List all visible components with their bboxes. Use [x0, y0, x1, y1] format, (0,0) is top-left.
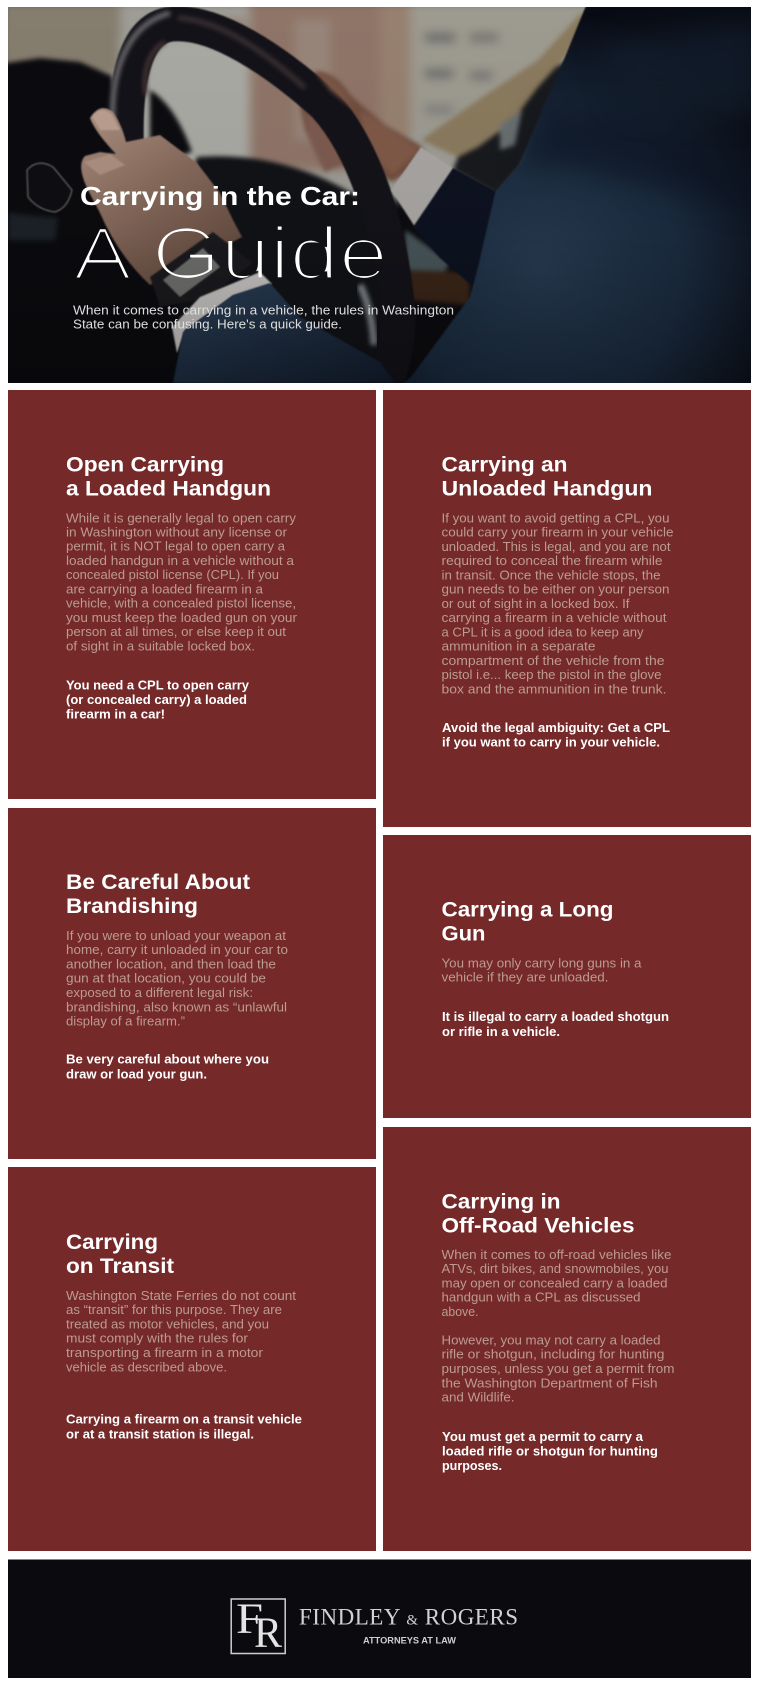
heading: a Loaded Handgun — [66, 477, 271, 501]
body text: Washington State Ferries do not count — [66, 1289, 297, 1303]
body text: gun needs to be either on your person — [442, 582, 670, 596]
heading: Gun — [442, 922, 486, 946]
body text: vehicle if they are unloaded. — [442, 971, 608, 985]
heading: Brandishing — [66, 894, 198, 918]
body text: concealed pistol license (CPL). If you — [66, 568, 279, 582]
body text: If you want to avoid getting a CPL, you — [442, 511, 670, 525]
body text: You may only carry long guns in a — [442, 957, 642, 971]
left sleeve — [173, 283, 395, 383]
heading — [442, 898, 614, 946]
callout: or at a transit station is illegal. — [66, 1427, 254, 1441]
body text: carrying a firearm in a vehicle without — [442, 611, 667, 625]
dashboard — [8, 55, 359, 240]
body text: a CPL it is a good idea to keep any — [442, 625, 644, 639]
body text — [66, 511, 297, 654]
panel: hero photo with title — [0, 0, 758, 395]
callout: You must get a permit to carry a — [442, 1430, 644, 1444]
heading: A Guide: A Guide — [73, 212, 388, 295]
heading: Unloaded Handgun — [442, 477, 652, 501]
body text: ammunition in a separate — [442, 640, 596, 654]
body text: gun at that location, you could be — [66, 972, 266, 986]
suit shoulder — [395, 0, 758, 390]
callout: (or concealed carry) a loaded — [66, 693, 247, 707]
heading: Carrying in the Car: Carrying in the Car: — [80, 181, 360, 211]
body text: in Washington without any license or — [66, 526, 287, 540]
panel: carrying in off-road vehicles — [383, 1127, 751, 1551]
body text: loaded handgun in a vehicle without a — [66, 554, 294, 568]
wristwatch — [150, 232, 253, 307]
body text: and Wildlife. — [442, 1391, 514, 1405]
body text: unloaded. This is legal, and you are not — [442, 540, 671, 554]
body text: permit, it is NOT legal to open carry a — [66, 540, 285, 554]
body text: or out of sight in a locked box. If — [442, 597, 630, 611]
body text: you must keep the loaded gun on your — [66, 611, 297, 625]
heading: Carrying a Long — [442, 898, 614, 922]
heading: on Transit — [66, 1254, 174, 1278]
intro text: State can be confusing. Here's a quick guide. — [73, 316, 342, 332]
callout — [442, 721, 670, 750]
left cuff — [172, 272, 272, 353]
panel: carrying on transit — [8, 1167, 376, 1551]
panel: be careful about brandishing — [8, 808, 376, 1159]
steering wheel rim — [113, 13, 398, 390]
right cuff and sleeve — [391, 147, 497, 285]
body text: vehicle, with a concealed pistol license, — [66, 597, 296, 611]
body text: required to conceal the firearm while — [442, 554, 663, 568]
body text — [442, 511, 674, 696]
callout: draw or load your gun. — [66, 1067, 207, 1081]
callout: Be very careful about where you — [66, 1052, 269, 1066]
beige pillar — [405, 13, 590, 305]
body text: treated as motor vehicles, and you — [66, 1318, 269, 1332]
body text: in transit. Once the vehicle stops, the — [442, 568, 661, 582]
body text: purposes, unless you get a permit from — [442, 1362, 674, 1376]
body text: could carry your firearm in your vehicle — [442, 526, 674, 540]
body text: pistol i.e... keep the pistol in the glove — [442, 668, 662, 682]
callout: if you want to carry in your vehicle. — [442, 736, 660, 750]
callout: loaded rifle or shotgun for hunting — [442, 1445, 658, 1459]
heading: Carrying an — [442, 453, 568, 477]
body text: vehicle as described above. — [66, 1360, 227, 1374]
thumb of right hand — [316, 72, 350, 109]
body text: transporting a firearm in a motor — [66, 1346, 263, 1360]
body text: are carrying a loaded firearm in a — [66, 582, 263, 596]
body text: If you were to unload your weapon at — [66, 929, 287, 943]
gear stalk — [27, 163, 72, 212]
heading — [66, 870, 250, 918]
callout: purposes. — [442, 1459, 502, 1473]
body text: person at all times, or else keep it out — [66, 625, 287, 639]
heading — [66, 1230, 174, 1278]
body text: ATVs, dirt bikes, and snowmobiles, you — [442, 1262, 669, 1276]
panel: open carrying a loaded handgun — [8, 390, 376, 799]
body text: the Washington Department of Fish — [442, 1376, 658, 1390]
body text: display of a firearm.” — [66, 1015, 185, 1029]
body text: above. — [442, 1305, 478, 1319]
body text — [442, 1248, 674, 1405]
body text: must comply with the rules for — [66, 1332, 248, 1346]
callout — [442, 1010, 669, 1039]
right hand — [300, 72, 430, 182]
heading — [66, 453, 271, 501]
callout: Carrying a firearm on a transit vehicle — [66, 1412, 302, 1426]
left hand — [81, 108, 242, 285]
body text: When it comes to off-road vehicles like — [442, 1248, 672, 1262]
body text — [66, 1289, 297, 1374]
body text: another location, and then load the — [66, 957, 276, 971]
heading — [442, 1189, 635, 1237]
body text: While it is generally legal to open carry — [66, 511, 297, 525]
callout: You need a CPL to open carry — [66, 678, 249, 692]
body text: as “transit” for this purpose. They are — [66, 1303, 282, 1317]
intro text — [73, 302, 454, 332]
body text: exposed to a different legal risk: — [66, 986, 253, 1000]
icon: FR logo: R — [254, 1610, 282, 1657]
heading: Off-Road Vehicles — [442, 1213, 635, 1237]
heading — [442, 453, 652, 501]
body text: brandishing, also known as “unlawful — [66, 1000, 287, 1014]
body text: handgun with a CPL as discussed — [442, 1291, 641, 1305]
body text: of sight in a suitable locked box. — [66, 640, 255, 654]
heading: Be Careful About — [66, 870, 250, 894]
panel: carrying an unloaded handgun — [383, 390, 751, 827]
body text: home, carry it unloaded in your car to — [66, 943, 288, 957]
callout: Avoid the legal ambiguity: Get a CPL — [442, 721, 670, 735]
callout — [66, 1412, 302, 1441]
body text: box and the ammunition in the trunk. — [442, 682, 666, 696]
heading: Open Carrying — [66, 453, 224, 477]
icon: FR logo — [231, 1596, 285, 1657]
body text: rifle or shotgun, including for hunting — [442, 1348, 665, 1362]
heading: Carrying — [66, 1230, 158, 1254]
body text: compartment of the vehicle from the — [442, 654, 665, 668]
callout — [66, 1052, 269, 1081]
intro text: When it comes to carrying in a vehicle, the rules in Washington — [73, 302, 454, 318]
callout — [66, 678, 249, 721]
heading: Carrying in — [442, 1189, 560, 1213]
callout — [442, 1430, 658, 1473]
callout: It is illegal to carry a loaded shotgun — [442, 1010, 669, 1024]
callout: or rifle in a vehicle. — [442, 1025, 560, 1039]
callout: firearm in a car! — [66, 707, 165, 721]
firm name: FINDLEY & ROGERS — [299, 1605, 518, 1630]
icon: FR logo: F — [236, 1596, 263, 1643]
body text — [442, 957, 642, 985]
body text — [66, 929, 288, 1029]
body text: may open or concealed carry a loaded — [442, 1276, 668, 1290]
tagline: ATTORNEYS AT LAW — [363, 1636, 457, 1646]
panel: footer — [8, 1560, 751, 1678]
photo: hands on steering wheel — [0, 0, 758, 395]
body text: However, you may not carry a loaded — [442, 1333, 661, 1347]
panel: carrying a long gun — [383, 835, 751, 1118]
